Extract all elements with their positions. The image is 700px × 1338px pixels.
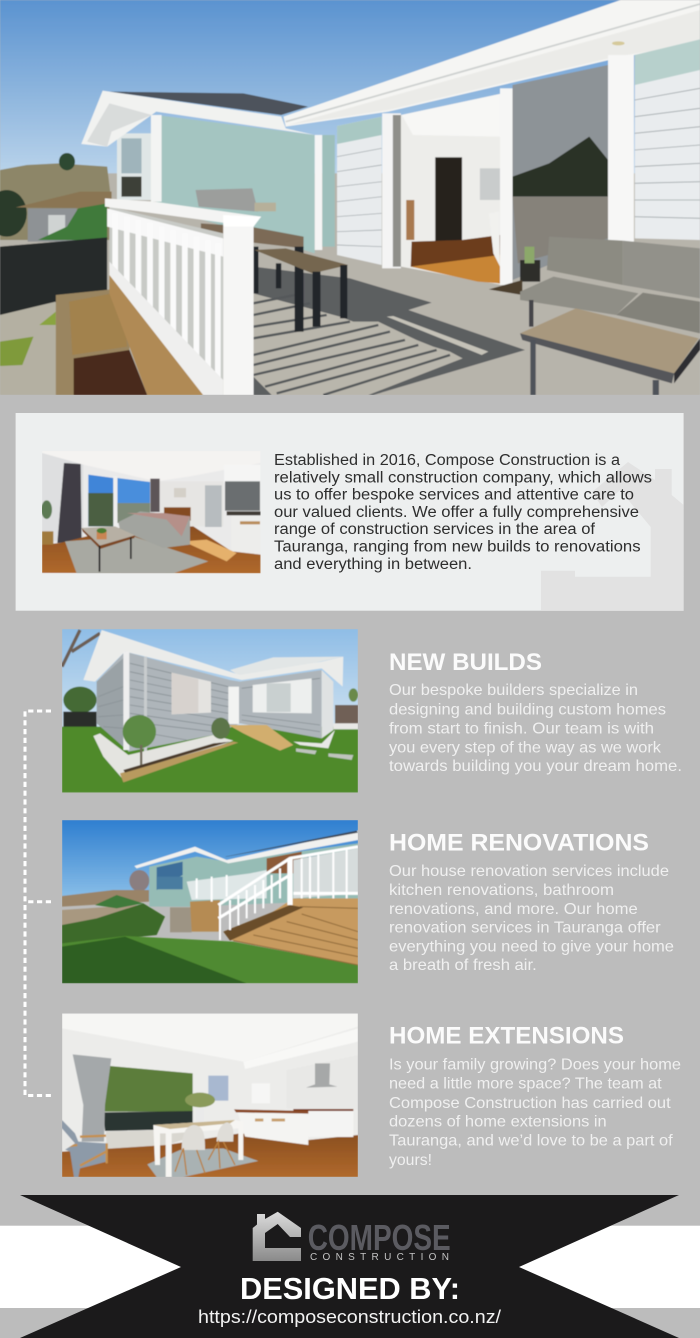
body: home extensions: Tauranga, and we’d love to be a part of: [389, 1133, 673, 1150]
coffee table: [520, 308, 699, 373]
intro text: Established in 2016, Compose Construction is a: [274, 452, 620, 469]
intro text: our valued clients. We offer a fully comprehensive: [274, 504, 639, 521]
body: new builds: from start to finish. Our team is with: [389, 720, 654, 737]
body: home renovations: Our house renovation services include: [389, 863, 669, 880]
intro text: [274, 452, 652, 573]
new builds text: [389, 649, 682, 775]
panel background: [16, 413, 684, 611]
photo: new builds house: [62, 629, 358, 793]
railing: [109, 207, 223, 395]
potted plant: [520, 260, 540, 282]
sofa: [547, 237, 623, 285]
dashed connector: [25, 711, 51, 1096]
main wing: [283, 0, 700, 127]
designed by heading: DESIGNED BY:: [240, 1271, 460, 1306]
BBQ: [196, 188, 258, 212]
body: home extensions: yours!: [389, 1152, 432, 1169]
intro text: and everything in between.: [274, 556, 472, 573]
body: home renovations: [389, 863, 674, 974]
body: home extensions: Is your family growing? Does your home: [389, 1056, 681, 1073]
body: new builds: Our bespoke builders specialize in: [389, 682, 638, 699]
intro photo: living room: [41, 451, 261, 573]
body: home extensions: need a little more space? The team at: [389, 1076, 662, 1093]
deck shadow: [253, 267, 525, 395]
rear wing: [156, 115, 315, 253]
body: home extensions: dozens of home extensions in: [389, 1114, 607, 1131]
body: new builds: towards building you your dream home.: [389, 758, 682, 775]
website url: https://composeconstruction.co.nz/: [198, 1307, 501, 1327]
intro text: range of construction services in the area of: [274, 521, 596, 538]
body: new builds: you every step of the way as we work: [389, 739, 662, 756]
body: new builds: designing and building custom homes: [389, 701, 666, 718]
heading: home extensions: HOME EXTENSIONS: [389, 1022, 624, 1049]
home extensions text: [389, 1022, 681, 1169]
intro text: Tauranga, ranging from new builds to renovations: [274, 539, 641, 556]
logo: [253, 1212, 451, 1263]
body: home renovations: a breath of fresh air.: [389, 957, 537, 974]
heading: new builds: NEW BUILDS: [389, 649, 542, 676]
logo mark: house: [253, 1212, 301, 1261]
photo: home renovations exterior: [62, 820, 358, 983]
logo wordmark: COMPOSE: [308, 1217, 451, 1258]
intro panel: [16, 413, 684, 611]
heading: home renovations: HOME RENOVATIONS: [389, 830, 649, 857]
watermark house: [541, 462, 684, 611]
body: home renovations: everything you need to give your home: [389, 939, 674, 956]
body: home extensions: [389, 1056, 681, 1169]
body: home extensions: Compose Construction has carried out: [389, 1095, 671, 1112]
home renovations text: [389, 830, 674, 974]
deck: [250, 247, 700, 395]
table and bench: [201, 223, 304, 248]
body: home renovations: renovations, and more. Our home: [389, 901, 638, 918]
body: home renovations: renovation services in Tauranga offer: [389, 920, 661, 937]
hero photo: deck and house: [0, 0, 700, 395]
door mat: [489, 280, 522, 295]
intro text: relatively small construction company, which allows: [274, 469, 652, 486]
body: new builds: [389, 682, 682, 775]
intro text: us to offer bespoke services and attentive care to: [274, 487, 634, 504]
white band: [0, 1226, 700, 1308]
footer ribbon: [0, 1195, 700, 1338]
photo: home extensions interior: [62, 1013, 358, 1177]
black banner: [20, 1195, 679, 1338]
body: home renovations: kitchen renovations, bathroom: [389, 882, 614, 899]
logo subtitle: CONSTRUCTION: [310, 1252, 449, 1263]
